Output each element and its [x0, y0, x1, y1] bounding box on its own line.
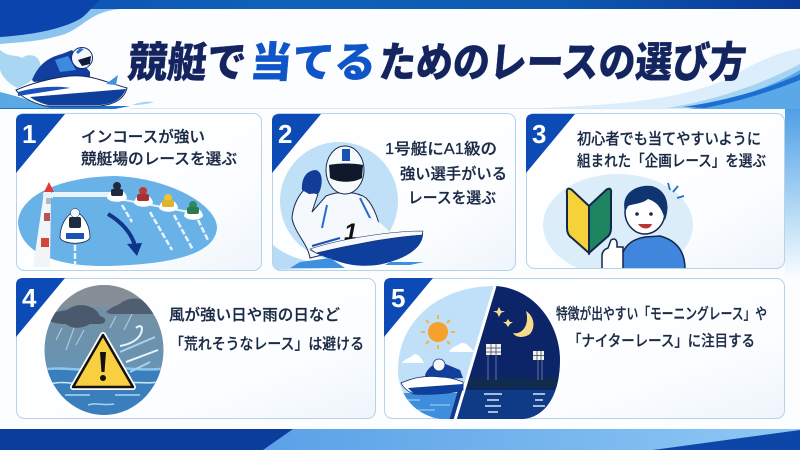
number badge 1: 1 [22, 119, 36, 149]
illustration: beginner mark and smiling man [543, 174, 693, 276]
boat wakes [75, 205, 208, 266]
number badge 5 [384, 278, 433, 337]
boat green [184, 201, 203, 220]
panel: card 4 [16, 278, 376, 418]
title: 競艇で [126, 39, 248, 86]
stars [493, 307, 513, 327]
number badge 5: 5 [391, 283, 405, 313]
illustration: race course with six boats [18, 176, 217, 267]
card 3 text: 組まれた「企画レース」を選ぶ [577, 152, 766, 170]
sun [421, 315, 455, 349]
panel: card 2 [272, 114, 516, 270]
number badge 4 [16, 278, 65, 337]
arrow [108, 214, 142, 256]
card 3 text: 初心者でも当てやすいように [577, 130, 761, 148]
boat red [134, 187, 153, 207]
number badge 3: 3 [532, 119, 546, 149]
moon [513, 311, 533, 337]
panel: card 5 [384, 278, 784, 425]
card 4 text: 風が強い日や雨の日など [169, 305, 340, 324]
card 1 text: インコースが強い [81, 127, 205, 146]
panel: card 3 [526, 114, 784, 276]
card 1 text: 競艇場のレースを選ぶ [81, 150, 237, 168]
card 2 text [385, 140, 507, 207]
header boat illustration [0, 48, 154, 108]
boat white [60, 208, 90, 243]
card 5 text [556, 304, 767, 350]
card 4 text: 「荒れそうなレース」は避ける [170, 335, 364, 353]
number badge 2 [272, 114, 321, 173]
card 4 text [169, 305, 364, 353]
card 2 text: 強い選手がいる [400, 164, 507, 183]
illustration: day and night [398, 286, 560, 419]
bottom band [0, 429, 800, 450]
illustration: racer on boat [273, 142, 424, 270]
boat and rider [401, 359, 463, 394]
title: ためのレースの選び方 [377, 39, 748, 86]
card 2 text: 1号艇にA1級の [385, 140, 497, 158]
illustration: storm warning [44, 285, 164, 415]
card 3 text [577, 130, 766, 170]
man [602, 183, 685, 269]
light reflections [484, 394, 545, 412]
number badge 2: 2 [278, 119, 292, 149]
beginner shield [567, 189, 611, 253]
boat yellow [159, 194, 178, 212]
title [126, 39, 748, 86]
card 2 text: レースを選ぶ [408, 189, 496, 207]
card 1 text [81, 127, 237, 168]
clouds [449, 343, 474, 352]
number badge 3 [526, 114, 575, 173]
boat black [107, 182, 127, 202]
card 5 text: 「ナイターレース」に注目する [568, 332, 755, 350]
panel: card 1 [16, 114, 262, 270]
number badge 4: 4 [22, 283, 37, 313]
warning triangle [73, 335, 133, 387]
floodlights [486, 344, 544, 380]
title: 当てる [248, 39, 378, 86]
number badge 1 [16, 114, 65, 173]
illustration: racer on boat: 1 [344, 219, 357, 246]
